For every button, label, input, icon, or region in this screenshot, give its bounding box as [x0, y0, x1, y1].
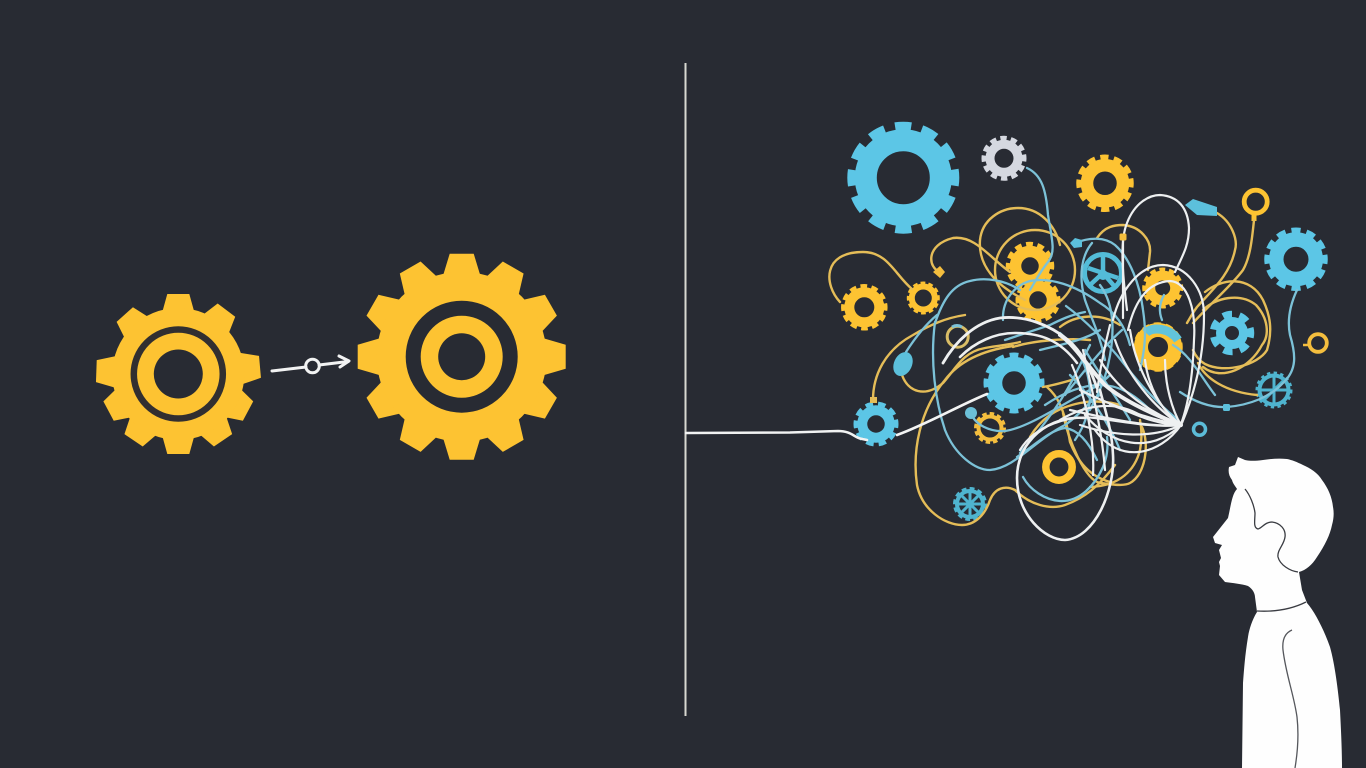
icon: blue cog wheel right: [1257, 373, 1291, 407]
icon: small yellow gear: [96, 294, 261, 454]
figure: person silhouette: [1213, 457, 1342, 768]
icon: blue ring small: [1194, 423, 1206, 435]
icon: yellow gear top: [1079, 157, 1131, 209]
divider line: [684, 63, 686, 716]
icon: blue wheel gear: [1084, 254, 1122, 292]
icon: blue gear center: [986, 355, 1042, 411]
icon: large blue gear: [851, 126, 955, 230]
icon: grey gear: [984, 138, 1024, 178]
panel: tangled system: [686, 126, 1342, 768]
panel: simple system: [96, 254, 566, 460]
icon: yellow ring bottom: [1046, 454, 1072, 480]
icon: yellow ring top right: [1244, 190, 1267, 221]
icon: yellow gear mid right: [1144, 270, 1181, 306]
icon: yellow gear left: [843, 286, 885, 328]
wire: main white line from divider: [686, 394, 987, 440]
icon: yellow ring gear: [976, 414, 1004, 442]
icon: blue gear at line start: [856, 404, 896, 444]
wire connectors: [870, 199, 1230, 419]
icon: yellow ring right: [1303, 334, 1327, 352]
tangled white wires: [943, 195, 1204, 540]
icon: blue six-tooth gear: [1214, 314, 1250, 352]
icon: yellow small gear: [908, 283, 938, 313]
arrow: connector with node: [272, 356, 349, 373]
tangled yellow wires: [829, 208, 1270, 525]
icon: yellow gear with blue overlay: [1135, 324, 1181, 370]
icon: blue cog wheel bottom: [954, 488, 986, 520]
icon: yellow gear center lower: [1018, 280, 1058, 320]
tangled blue wires: [906, 168, 1297, 501]
icon: yellow thin ring: [947, 326, 968, 347]
icon: blue gear right: [1267, 230, 1325, 288]
icon: large yellow gear: [358, 254, 566, 460]
icon: yellow gear center upper: [1008, 244, 1052, 288]
